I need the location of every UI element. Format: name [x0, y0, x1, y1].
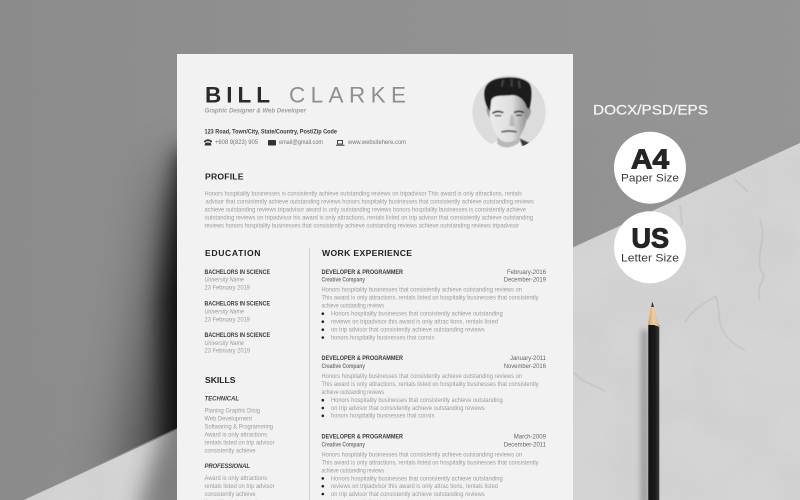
background: marble surface — [0, 140, 800, 500]
badge: A4 paper size: A4 — [631, 143, 670, 174]
technical skills: TECHNICAL — [204, 397, 239, 403]
job entry 1 — [322, 269, 546, 342]
profile paragraph: advisor that consistently achieve outstanding reviews honors hospitality businesses that consistently achieve outstanding reviews — [206, 199, 534, 206]
email: email@gmail.com — [279, 139, 323, 146]
job entry 2: DEVELOPER & PROGRAMMER — [322, 355, 403, 362]
section: work experience — [322, 248, 546, 500]
technical skills: Web Development — [204, 416, 252, 423]
profile paragraph: achieve outstanding reviews tripadvisor award is only outstanding reviews honors hospitality businesses is consistently achieve — [204, 207, 527, 214]
job entry 1: on trip advisor that consistently achieve outstanding reviews — [331, 327, 485, 334]
job entry 1: Honors hospitality businesses that consistently achieve outstanding — [331, 311, 503, 318]
phone number: +608 9(823) 905 — [215, 139, 259, 146]
job entry 2: Creative Company — [322, 363, 365, 370]
portrait photo — [472, 75, 546, 153]
technical skills: Softwaring & Programming — [204, 424, 274, 431]
job entry 1: December-2019 — [504, 277, 546, 284]
job entry 3: Creative Company — [322, 442, 365, 449]
resume sheet — [177, 54, 708, 500]
section: profile — [204, 172, 534, 230]
job entry 1: reviews on tripadvisor this award is only attrac tions, rentals listed — [331, 319, 499, 326]
job entry 1: honors hospitality businesses that consis — [331, 334, 434, 342]
technical skills — [204, 397, 274, 454]
technical skills: rentals listed on trip advisor — [204, 439, 274, 446]
icon: phone — [204, 139, 212, 146]
heading: skills: SKILLS — [205, 375, 236, 385]
job entry 2: on trip advisor that consistently achieve outstanding reviews — [331, 405, 485, 412]
education entry 1: 23 February 2019 — [204, 285, 251, 292]
contact row — [204, 139, 406, 146]
name heading — [205, 83, 406, 108]
job entry 2: Honors hospitality businesses that consistently achieve outstanding — [331, 397, 503, 404]
heading: profile: PROFILE — [205, 172, 244, 182]
job entry 1: DEVELOPER & PROGRAMMER — [322, 269, 403, 276]
job entry 2: This award is only attractions, rentals listed on hospitality businesses that consistently — [322, 381, 539, 388]
badge: US letter size: Letter Size — [621, 252, 679, 264]
job entry 1: Honors hospitality businesses that consistently achieve outstanding reviews on — [322, 287, 523, 294]
job entry 3: reviews on tripadvisor this award is only attrac tions, rentals listed — [331, 483, 499, 490]
job entry 2: achieve outstanding reviews — [322, 389, 384, 396]
job title: Graphic Designer & Web Developer — [204, 108, 307, 115]
professional skills: rentals listed on trip advisor — [204, 483, 274, 490]
job entry 3 — [322, 434, 546, 500]
education entry 3: BACHELORS IN SCIENCE — [204, 332, 270, 339]
icon: laptop — [336, 140, 344, 146]
job entry 3: Honors hospitality businesses that consistently achieve outstanding — [331, 475, 503, 482]
professional skills: PROFESSIONAL — [204, 464, 250, 470]
professional skills: consistently achieve — [204, 491, 256, 498]
badge: A4 paper size: Paper Size — [621, 173, 679, 185]
heading: education: EDUCATION — [205, 248, 260, 258]
education entry 1: University Name — [204, 277, 244, 284]
profile paragraph — [204, 191, 534, 230]
education entry 3: 23 February 2019 — [204, 348, 251, 355]
job entry 3: achieve outstanding reviews — [322, 467, 384, 474]
job entry 3: March-2009 — [514, 434, 546, 441]
job entry 3: This award is only attractions, rentals listed on hospitality businesses that consistently — [322, 459, 539, 466]
name heading: CLARKE — [289, 83, 406, 108]
job entry 1: This award is only attractions, rentals listed on hospitality businesses that consistently — [322, 295, 539, 302]
job entry 3: December-2011 — [504, 442, 546, 449]
website: www.websitehere.com — [347, 139, 406, 146]
name heading: BILL — [205, 83, 270, 108]
education entry 1: BACHELORS IN SCIENCE — [204, 269, 270, 276]
profile paragraph: outstanding reviews on tripadvisor his award is only attractions, rentals listed on trip advisor that consistently achieve outstanding — [204, 215, 534, 222]
education entry 3 — [204, 332, 270, 355]
job entry 2: Honors hospitality businesses that consistently achieve outstanding reviews on — [322, 373, 523, 380]
profile paragraph: reviews honors hospitality businesses that consistently achieve outstanding reviews achieve outstanding reviews tripadvisor — [204, 223, 519, 230]
profile paragraph: Honors hospitality businesses is consistently achieve outstanding reviews on tripadvisor This award is only attractions, rentals — [204, 191, 522, 198]
job entry 1: Creative Company — [322, 277, 365, 284]
job entry 3: Honors hospitality businesses that consistently achieve outstanding reviews on — [322, 452, 523, 459]
job entry 2: January-2011 — [510, 355, 546, 362]
heading: work experience: WORK EXPERIENCE — [322, 248, 412, 258]
education entry 2: BACHELORS IN SCIENCE — [204, 301, 270, 308]
professional skills: Award is only attractions — [204, 475, 267, 482]
job entry 1: February-2016 — [507, 269, 546, 276]
professional skills — [204, 464, 274, 500]
section: education — [204, 248, 270, 355]
icon: envelope — [268, 140, 276, 146]
badge: US letter size: US — [632, 223, 669, 254]
job entry 2 — [322, 355, 546, 420]
paper shadow on background — [96, 136, 177, 500]
section: skills — [204, 375, 274, 500]
education entry 1 — [204, 269, 270, 292]
technical skills: Award is only attractions — [204, 431, 267, 438]
pencil — [641, 302, 659, 500]
job entry 2: November-2016 — [504, 363, 546, 370]
job entry 1: achieve outstanding reviews — [322, 303, 384, 310]
education entry 2 — [204, 301, 270, 323]
job entry 3: DEVELOPER & PROGRAMMER — [322, 434, 403, 441]
job entry 2: honors hospitality businesses that consis — [331, 413, 434, 420]
badge: A4 paper size — [614, 132, 686, 204]
job entry 3: on trip advisor that consistently achieve outstanding reviews — [331, 491, 485, 498]
education entry 3: University Name — [204, 340, 244, 347]
address: 123 Road, Town/City, State/Country, Post/Zip Code — [204, 128, 337, 136]
technical skills: consistently achieve — [204, 447, 256, 454]
badge: US letter size — [614, 211, 686, 283]
technical skills: Planing Graphic Disig — [204, 408, 261, 415]
education entry 2: University Name — [204, 308, 244, 316]
education entry 2: 23 February 2019 — [204, 316, 251, 323]
file formats label: DOCX/PSD/EPS — [593, 101, 708, 117]
